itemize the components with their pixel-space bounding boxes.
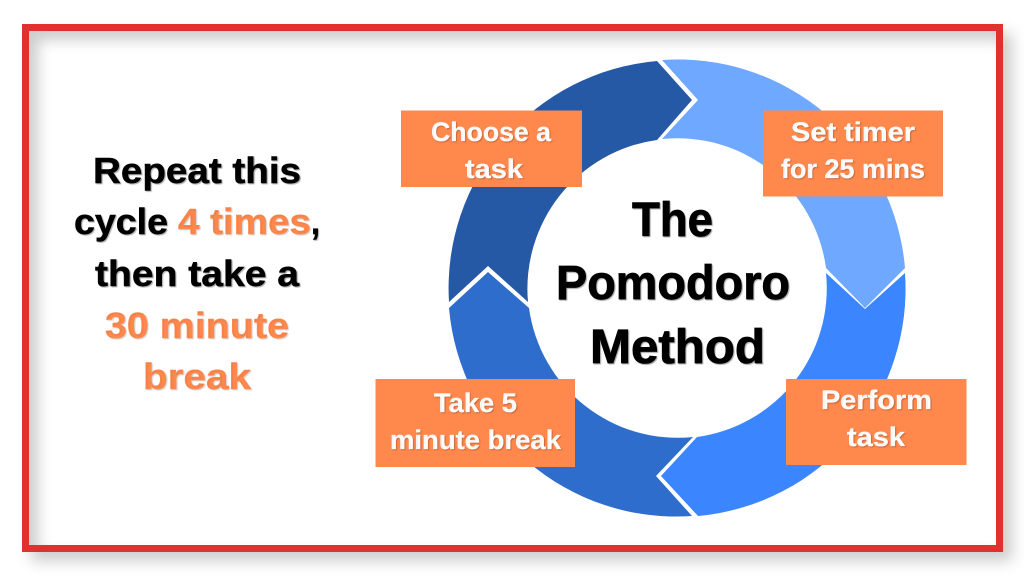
label: take 5 minute break: minute break — [390, 425, 562, 455]
callout: repeat cycle instructions: then take a — [95, 253, 300, 294]
arrow: perform task segment — [661, 273, 906, 516]
label: take 5 minute break — [376, 379, 575, 467]
label: perform task: Perform — [821, 385, 932, 415]
label: choose a task: task — [465, 154, 524, 184]
arrow: take break segment — [449, 272, 693, 517]
label: set timer for 25 mins: Set timer — [791, 117, 916, 147]
label: choose a task — [401, 110, 582, 187]
label: perform task: task — [847, 422, 906, 452]
cycle diagram: four arrow ring — [449, 59, 906, 517]
label: take 5 minute break: Take 5 — [434, 388, 517, 418]
label: set timer for 25 mins: for 25 mins — [781, 154, 925, 184]
arrow: set timer segment — [662, 59, 905, 308]
arrow: choose task segment — [449, 61, 692, 302]
title: The Pomodoro Method: The — [632, 194, 713, 247]
callout: repeat cycle instructions: 4 times — [178, 201, 311, 242]
title: The Pomodoro Method — [556, 194, 790, 374]
callout: repeat cycle instructions: 30 minute — [105, 305, 289, 346]
callout: repeat cycle instructions: break — [143, 356, 252, 397]
callout: repeat cycle instructions: cycle — [74, 201, 168, 242]
label: choose a task: Choose a — [431, 117, 552, 147]
title: The Pomodoro Method: Method — [590, 321, 765, 374]
callout: repeat cycle instructions — [74, 150, 320, 397]
title: The Pomodoro Method: Pomodoro — [556, 257, 790, 310]
callout: repeat cycle instructions: Repeat this — [93, 150, 301, 191]
label: set timer for 25 mins — [763, 110, 943, 196]
callout: repeat cycle instructions: , — [311, 201, 320, 242]
label: perform task — [786, 379, 966, 465]
